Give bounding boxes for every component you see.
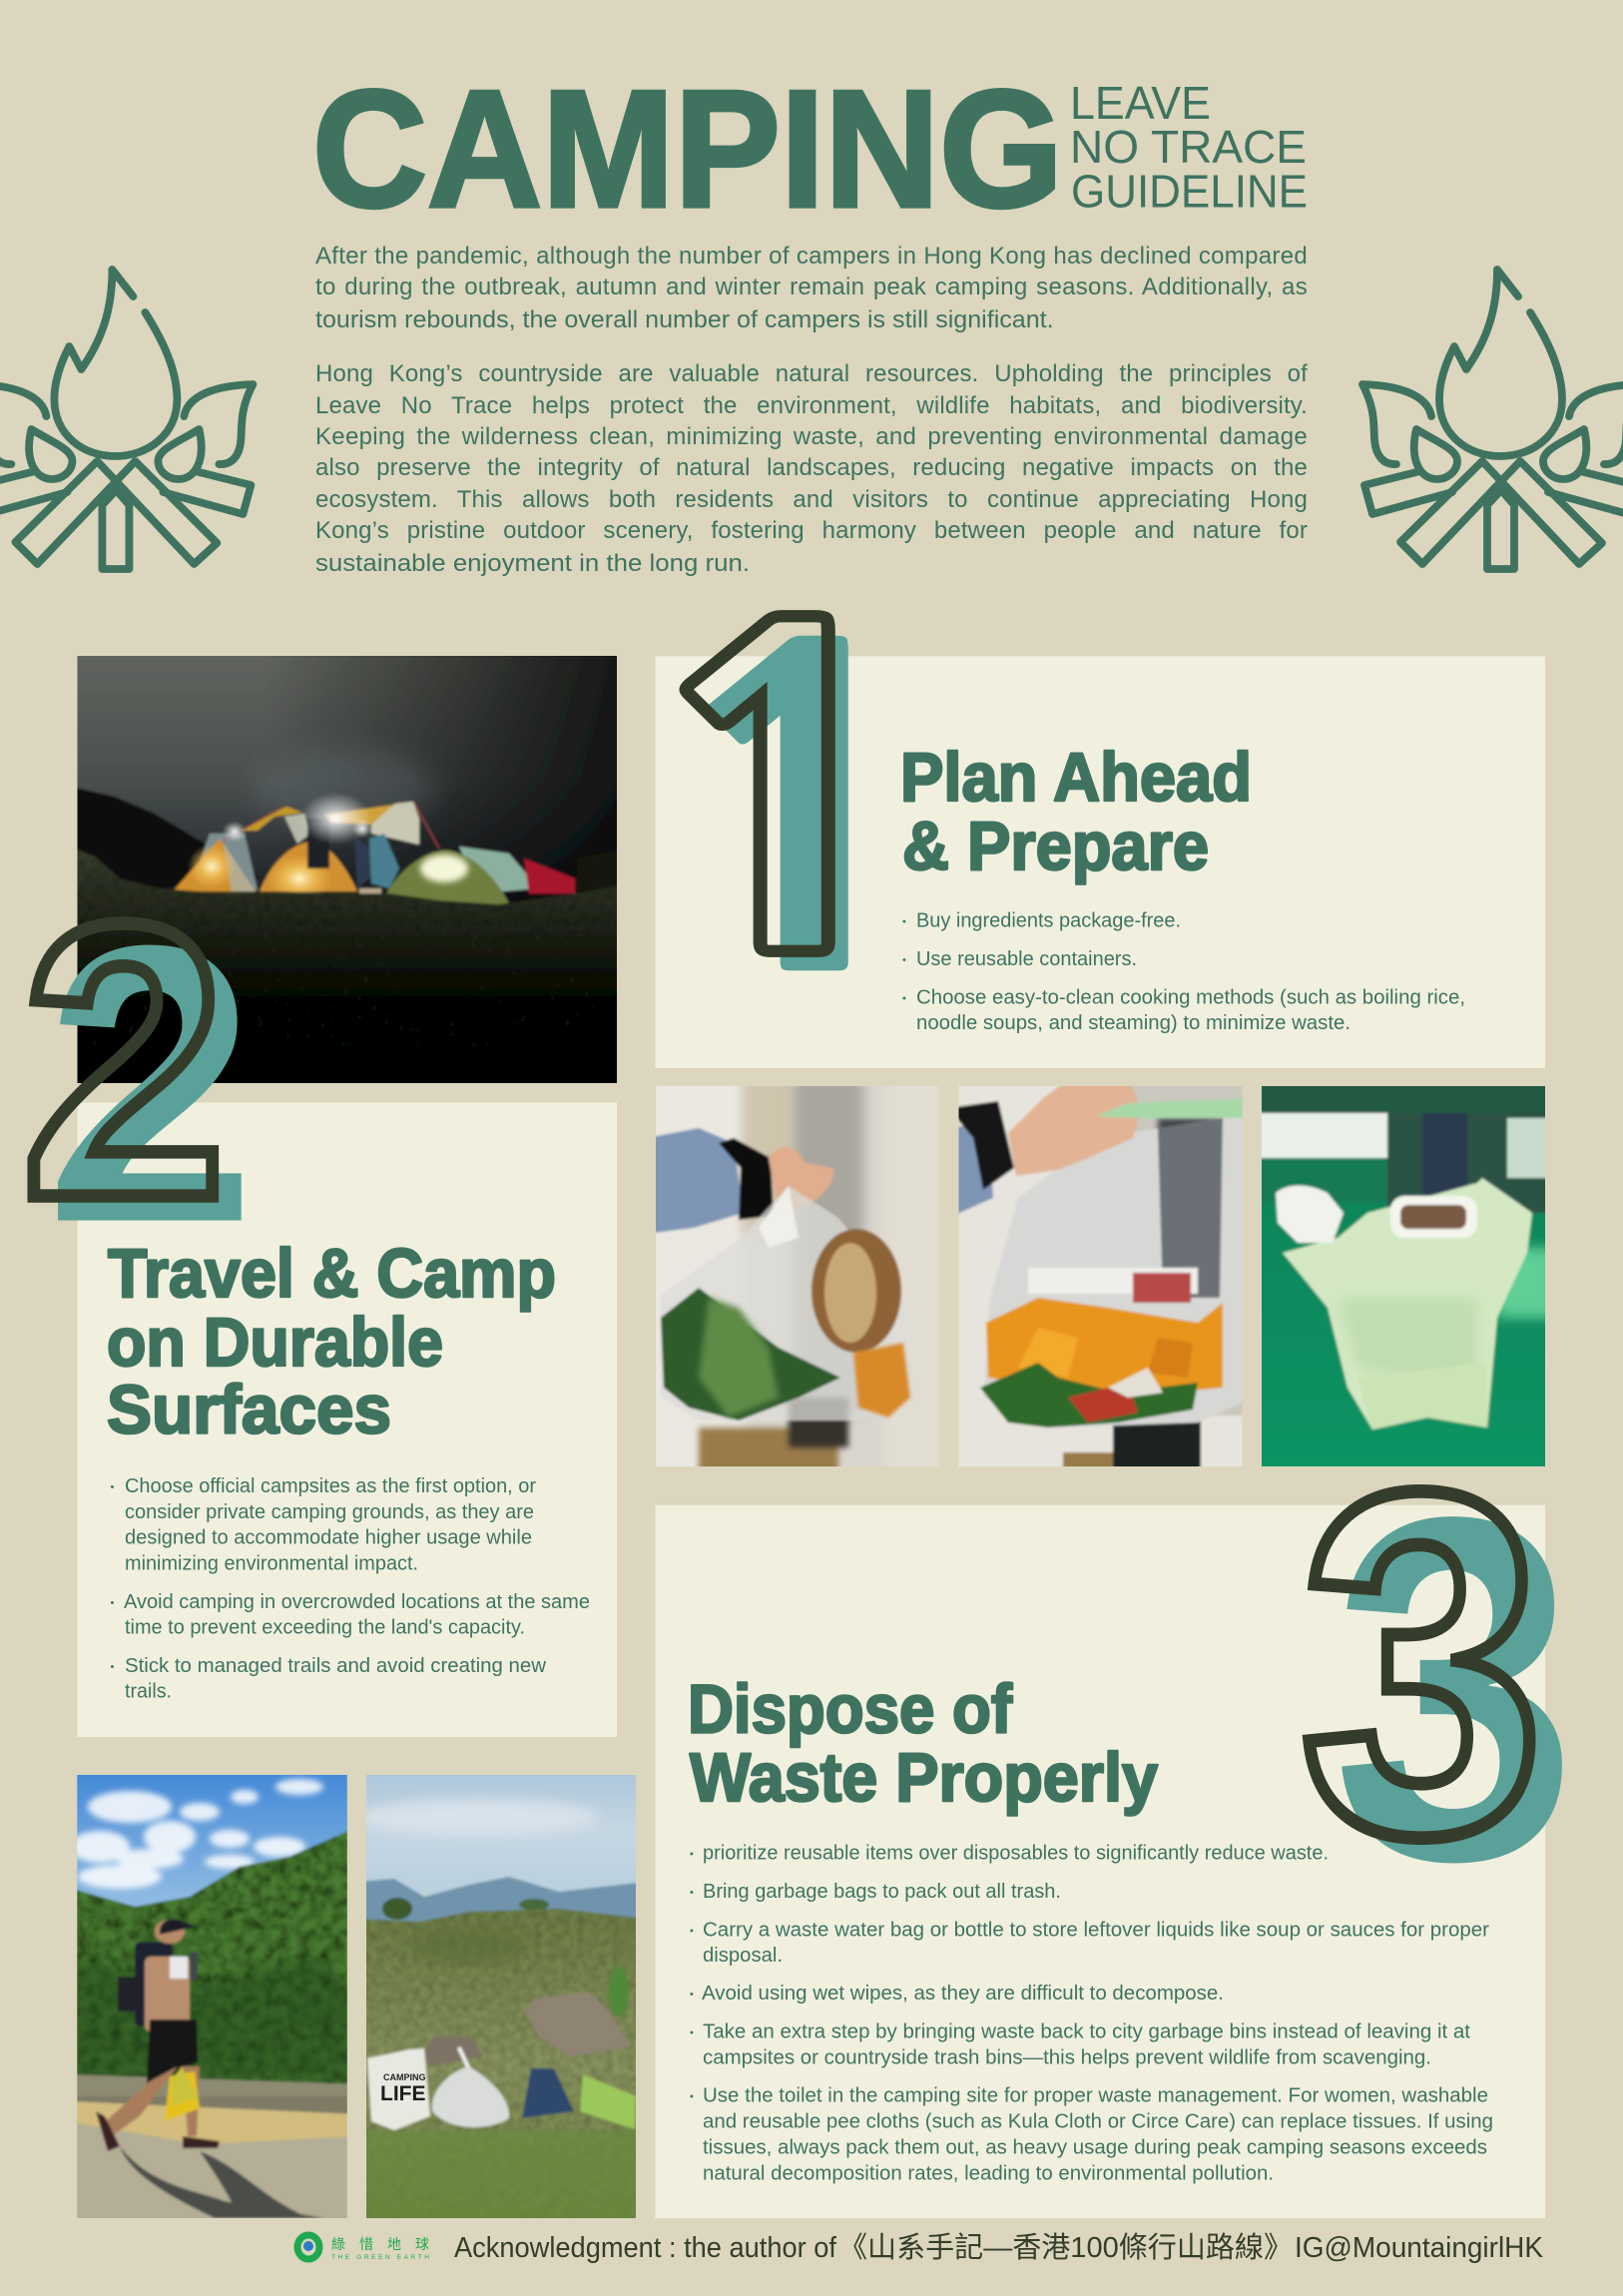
intro paragraph two: Leave No Trace helps protect the environment, wildlife habitats, and biodiversity. [315, 392, 1308, 419]
list: travel and camp bullets: consider private camping grounds, as they are [125, 1501, 534, 1523]
heading: travel and camp [107, 1235, 556, 1448]
subtitle: GUIDELINE [1071, 166, 1308, 218]
acknowledgment: IG@MountaingirlHK [1295, 2232, 1544, 2264]
list: plan ahead bullets: • [902, 916, 906, 928]
heading: plan ahead [900, 739, 1252, 884]
heading: plan ahead: & Prepare [902, 808, 1209, 884]
logo: the green earth: THE GREEN EARTH [331, 2254, 429, 2261]
acknowledgment: 《山系手記—香港100條行山路線》 [838, 2231, 1293, 2264]
list: travel and camp bullets: designed to accommodate higher usage while [125, 1527, 532, 1549]
heading: travel and camp: Surfaces [107, 1372, 391, 1448]
list: travel and camp bullets: trails. [125, 1681, 172, 1703]
intro paragraph two: Keeping the wilderness clean, minimizing waste, and preventing environmental damage [315, 423, 1308, 450]
list: travel and camp bullets: • [110, 1661, 114, 1673]
icon: left campfire [0, 270, 253, 569]
heading: dispose of waste [688, 1671, 1158, 1816]
list: travel and camp bullets: • [110, 1481, 114, 1493]
intro paragraph one [315, 243, 1308, 333]
numeral 1: 1 [634, 581, 934, 1013]
heading: travel and camp: Travel & Camp [108, 1235, 556, 1312]
list: dispose of waste bullets: disposal. [703, 1945, 783, 1967]
heading: travel and camp: on Durable [107, 1304, 443, 1381]
list: dispose of waste bullets: • [690, 1887, 694, 1899]
list: travel and camp bullets: Avoid camping in overcrowded locations at the same [124, 1591, 590, 1613]
list: dispose of waste bullets: Take an extra step by bringing waste back to city garbage bins instead of leaving it at [703, 2021, 1470, 2043]
acknowledgment [454, 2231, 1544, 2264]
logo: the green earth [297, 2235, 429, 2261]
photo: hiker walking with trash bag [77, 1775, 347, 2218]
intro paragraph two: also preserve the integrity of natural landscapes, reducing negative impacts on the [315, 454, 1308, 481]
list: dispose of waste bullets: tissues, always pack them out, as heavy usage during peak camping seasons exceeds [703, 2137, 1487, 2159]
numeral 3: 3 [1299, 1392, 1545, 1937]
list: dispose of waste bullets: and reusable pee cloths (such as Kula Cloth or Circe Care) can replace tissues. If using [703, 2111, 1493, 2133]
title: CAMPING [312, 57, 1063, 243]
list: plan ahead bullets: • [902, 954, 906, 966]
list: dispose of waste bullets: • [690, 1849, 694, 1861]
intro paragraph two: Hong Kong’s countryside are valuable natural resources. Upholding the principles of [315, 360, 1308, 387]
panel: travel and camp [78, 1102, 617, 1737]
panel: plan ahead [655, 656, 1545, 1068]
list: plan ahead bullets: Use reusable containers. [916, 948, 1137, 970]
photo: vegetable scraps in plastic bag [656, 1086, 938, 1466]
list: travel and camp bullets [110, 1475, 590, 1703]
heading: dispose of waste: Dispose of [688, 1671, 1013, 1748]
list: travel and camp bullets: Stick to managed trails and avoid creating new [125, 1655, 547, 1677]
subtitle [1070, 77, 1308, 218]
icon: right campfire [1362, 270, 1623, 569]
acknowledgment: Acknowledgment : the author of [454, 2232, 837, 2264]
photo: collected trash on grass [366, 1775, 636, 2218]
list: dispose of waste bullets: Carry a waste water bag or bottle to store leftover liquids like soup or sauces for proper [703, 1919, 1489, 1941]
subtitle: NO TRACE [1070, 121, 1307, 173]
list: dispose of waste bullets: • [690, 2091, 694, 2103]
list: dispose of waste bullets: Avoid using wet wipes, as they are difficult to decompose. [702, 1983, 1224, 2005]
photo: water bag on green floor [1262, 1086, 1545, 1466]
numeral 1: 1 [654, 600, 954, 1032]
photo: food scraps in zip bag [958, 1086, 1242, 1466]
photo: collected trash on grass: LIFE [380, 2082, 425, 2105]
intro paragraph one: tourism rebounds, the overall number of campers is still significant. [315, 306, 1054, 333]
list: plan ahead bullets: noodle soups, and steaming) to minimize waste. [916, 1012, 1351, 1034]
numeral 2: 2 [46, 866, 255, 1303]
list: plan ahead bullets [902, 910, 1465, 1034]
list: dispose of waste bullets: Use the toilet in the camping site for proper waste management. For women, washable [703, 2085, 1488, 2107]
list: dispose of waste bullets: • [690, 2027, 694, 2039]
subtitle: LEAVE [1070, 77, 1211, 129]
list: dispose of waste bullets [690, 1843, 1493, 2184]
list: dispose of waste bullets: Bring garbage bags to pack out all trash. [703, 1881, 1061, 1903]
list: travel and camp bullets: time to prevent exceeding the land's capacity. [125, 1617, 525, 1639]
list: dispose of waste bullets: natural decomposition rates, leading to environmental pollution. [703, 2162, 1274, 2184]
logo: the green earth: 綠惜地球 [331, 2236, 429, 2252]
list: plan ahead bullets: Buy ingredients package-free. [916, 910, 1181, 932]
list: plan ahead bullets: • [902, 993, 906, 1005]
intro paragraph one: to during the outbreak, autumn and winter remain peak camping seasons. Additionally, as [315, 274, 1308, 300]
photo: night campsite [67, 646, 627, 1093]
list: dispose of waste bullets: • [690, 1989, 694, 2001]
numeral 2: 2 [21, 843, 228, 1279]
list: travel and camp bullets: Choose official campsites as the first option, or [125, 1475, 536, 1497]
photo: collected trash on grass: CAMPING [383, 2072, 425, 2082]
numeral 3: 3 [1332, 1417, 1578, 1963]
intro paragraph two: sustainable enjoyment in the long run. [315, 550, 750, 577]
intro paragraph two: ecosystem. This allows both residents and visitors to continue appreciating Hong [315, 486, 1308, 513]
list: travel and camp bullets: • [110, 1597, 114, 1609]
list: travel and camp bullets: minimizing environmental impact. [125, 1553, 418, 1575]
heading: dispose of waste: Waste Properly [690, 1739, 1158, 1816]
list: dispose of waste bullets: campsites or countryside trash bins—this helps prevent wildlife from scavenging. [703, 2046, 1431, 2068]
heading: plan ahead: Plan Ahead [900, 739, 1252, 816]
list: dispose of waste bullets: prioritize reusable items over disposables to significantly reduce waste. [703, 1843, 1329, 1865]
list: dispose of waste bullets: • [690, 1925, 694, 1937]
intro paragraph one: After the pandemic, although the number of campers in Hong Kong has declined compared [315, 243, 1308, 270]
intro paragraph two: Kong’s pristine outdoor scenery, fostering harmony between people and nature for [315, 517, 1308, 544]
intro paragraph two [315, 360, 1308, 577]
panel: dispose of waste [655, 1505, 1545, 2218]
list: plan ahead bullets: Choose easy-to-clean cooking methods (such as boiling rice, [916, 987, 1465, 1009]
